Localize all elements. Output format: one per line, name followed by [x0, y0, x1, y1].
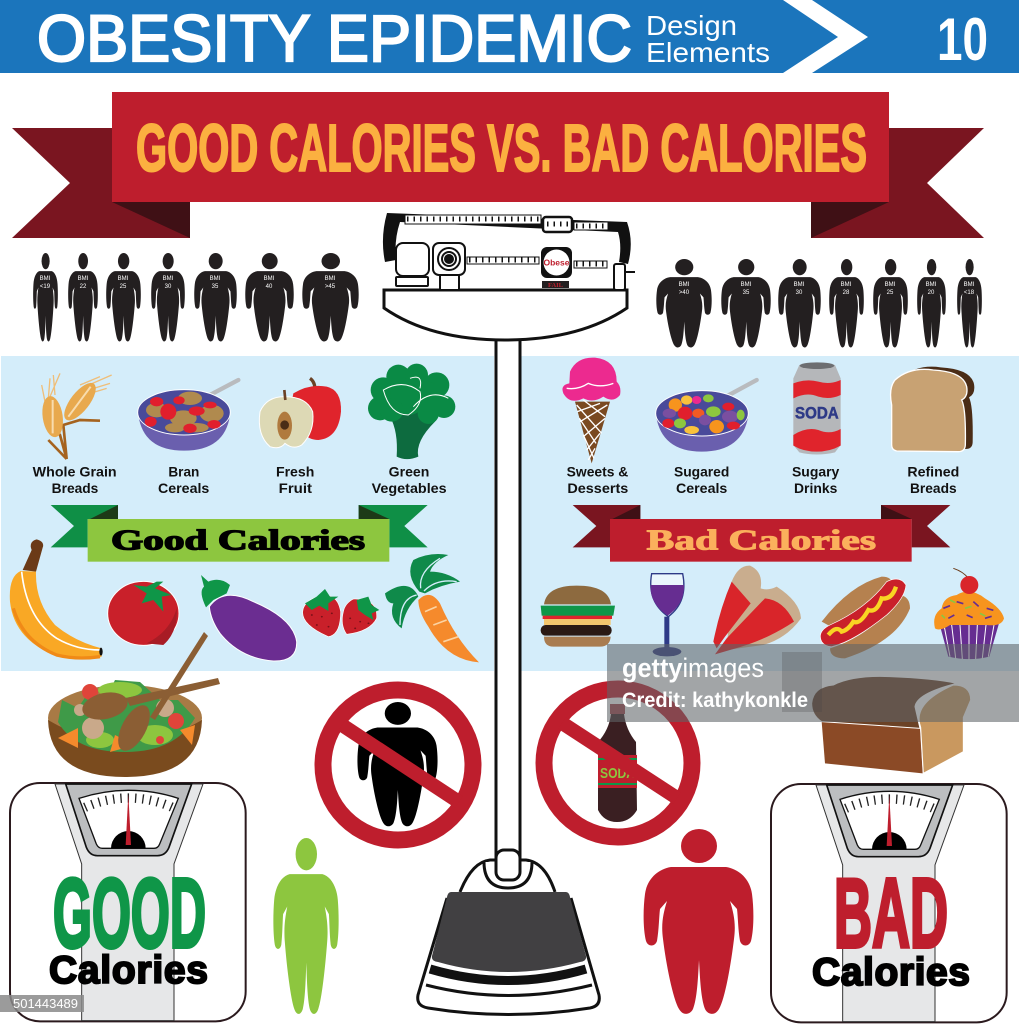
overweight red silhouette: [644, 829, 753, 1014]
header subtitle: Elements: [646, 37, 770, 68]
icon: soda bottle: [598, 704, 637, 822]
BMI silhouettes decreasing fitness, left: BMI: [264, 276, 275, 282]
icon: banana: [10, 539, 103, 659]
bathroom scale card: bad calories: [771, 784, 1007, 1022]
header title: OBESITY EPIDEMIC: [37, 1, 632, 75]
item labels: Desserts: [567, 481, 629, 496]
BMI silhouettes, right: BMI: [841, 282, 852, 288]
header chevron arrow: [783, 0, 868, 73]
BMI silhouettes, right: BMI: [679, 282, 690, 288]
good calories label: Calories: [49, 949, 208, 992]
item labels: Refined: [907, 465, 959, 480]
BMI silhouettes, right: 35: [743, 290, 750, 296]
obese marker: [541, 247, 572, 289]
BMI silhouettes, right: BMI: [885, 282, 896, 288]
bad calories ribbon: Bad Calories: [647, 525, 876, 556]
item labels: Cereals: [676, 481, 728, 496]
item labels: Breads: [52, 481, 99, 496]
BMI silhouettes decreasing fitness, left: 40: [266, 284, 273, 290]
image id tag: 501443489: [13, 996, 78, 1011]
watermark logo: gettyimages: [622, 653, 764, 683]
scale weights: [396, 243, 635, 290]
item labels: Sugary: [792, 465, 840, 480]
scale beam frame: [383, 213, 631, 264]
BMI silhouettes, right: 28: [843, 290, 850, 296]
header number: 10: [937, 6, 988, 73]
panel: bad calories background: [520, 356, 1019, 671]
good label: GOOD: [53, 858, 206, 968]
BMI silhouettes, right: >40: [679, 290, 690, 296]
icon: salad bowl with servers: [48, 632, 220, 777]
watermark band: [607, 644, 1019, 722]
item labels: [33, 465, 447, 496]
BMI silhouettes decreasing fitness, left: BMI: [325, 276, 336, 282]
item labels: Whole Grain: [33, 465, 117, 480]
BMI silhouettes decreasing fitness, left: BMI: [163, 276, 174, 282]
icon: soda can: [793, 362, 841, 454]
item labels: [567, 465, 959, 496]
item labels: Sweets &: [567, 465, 628, 480]
BMI silhouettes, right: 25: [887, 290, 894, 296]
BMI silhouettes, right: BMI: [794, 282, 805, 288]
header subtitle: [646, 10, 770, 68]
BMI silhouettes, right: BMI: [741, 282, 752, 288]
wooden servers: [80, 632, 220, 756]
obese marker: Obese: [544, 258, 570, 268]
BMI silhouettes, right: 30: [796, 290, 803, 296]
item labels: Vegetables: [372, 481, 447, 496]
image id tag: [0, 995, 84, 1012]
watermark credit: Credit: kathykonkle: [622, 689, 808, 712]
icon: loaf of bread: [812, 676, 971, 773]
item labels: Green: [389, 465, 429, 480]
BMI silhouettes decreasing fitness, left: 25: [120, 284, 127, 290]
BMI silhouettes decreasing fitness, left: <19: [40, 284, 51, 290]
BMI silhouettes, right: BMI: [964, 282, 975, 288]
BMI silhouettes, right: [656, 259, 982, 347]
BMI silhouettes decreasing fitness, left: 30: [165, 284, 172, 290]
BMI silhouettes decreasing fitness, left: BMI: [210, 276, 221, 282]
item labels: Bran: [168, 465, 199, 480]
BMI silhouettes, right: <18: [964, 290, 975, 296]
BMI silhouettes, right: BMI: [926, 282, 937, 288]
BMI silhouettes decreasing fitness, left: [33, 253, 359, 341]
item labels: Cereals: [158, 481, 210, 496]
scale rulers: [405, 215, 608, 268]
no-entry sign: soda bottle: [544, 689, 692, 837]
doctor scale stand: [383, 213, 635, 1014]
icon: soda can: SODA: [795, 404, 839, 423]
icon: hamburger: [541, 586, 615, 647]
good calories ribbon: [51, 505, 428, 562]
BMI silhouettes decreasing fitness, left: 22: [80, 284, 87, 290]
icon: wheat: [40, 373, 112, 459]
item labels: Fruit: [279, 481, 312, 496]
icon: soda bottle: SODA: [600, 765, 635, 782]
header banner: [0, 0, 1019, 75]
icon: t-bone steak: [713, 566, 801, 654]
BMI silhouettes decreasing fitness, left: BMI: [78, 276, 89, 282]
item labels: Breads: [910, 481, 957, 496]
panel contents: good calories: [10, 364, 479, 662]
panel contents: bad calories: [541, 358, 1004, 660]
panel: good calories background: [1, 356, 494, 671]
scale head dome: [384, 290, 627, 340]
healthy green silhouette: [273, 838, 339, 1014]
BMI silhouettes decreasing fitness, left: BMI: [118, 276, 129, 282]
bathroom scale card: good calories: [10, 783, 246, 1021]
header subtitle: Design: [646, 10, 737, 41]
icon: ice cream cone: [562, 358, 620, 463]
icon: carrot: [385, 554, 479, 662]
scale pole: [496, 335, 520, 880]
scale base: [418, 850, 599, 1014]
obese marker: FAIL: [548, 282, 564, 289]
good calories ribbon: Good Calories: [111, 525, 365, 556]
icon: bran cereal bowl: [138, 380, 238, 451]
BMI silhouettes decreasing fitness, left: >45: [325, 284, 336, 290]
main title ribbon: [12, 92, 984, 238]
icon: bread slice: [891, 367, 974, 452]
item labels: Drinks: [794, 481, 838, 496]
icon: apple: [259, 378, 341, 448]
bad calories ribbon: [573, 505, 950, 562]
item labels: Sugared: [674, 465, 729, 480]
BMI silhouettes decreasing fitness, left: 35: [212, 284, 219, 290]
icon: sugared cereal bowl: [656, 380, 757, 452]
item labels: Fresh: [276, 465, 314, 480]
BMI silhouettes, right: 20: [928, 290, 935, 296]
BMI silhouettes decreasing fitness, left: BMI: [40, 276, 51, 282]
icon: tomato: [108, 581, 179, 645]
no-entry sign: obesity: [323, 690, 473, 840]
icon: broccoli: [368, 364, 455, 459]
icon: cupcake: [934, 568, 1004, 660]
bad calories label: Calories: [812, 951, 970, 994]
icon: eggplant: [201, 575, 297, 661]
icon: strawberries: [303, 589, 379, 637]
icon: wine glass: [651, 574, 684, 656]
icon: hot dog: [820, 577, 910, 658]
